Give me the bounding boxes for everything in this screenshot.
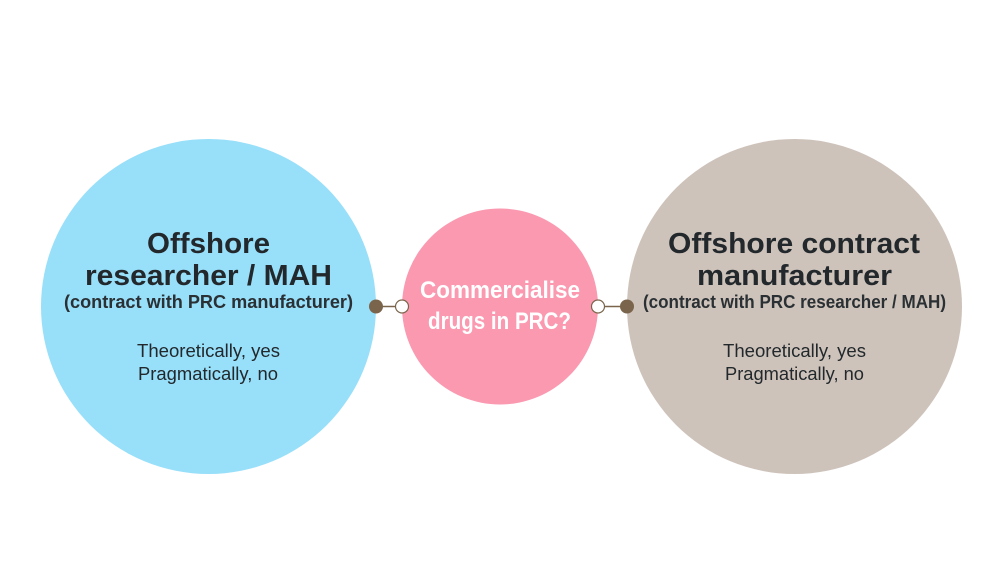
panel: offshore contract manufacturer circle — [627, 139, 962, 474]
text: theoretically yes, pragmatically no — [723, 341, 866, 384]
heading: offshore researcher / MAH — [85, 228, 332, 292]
heading: offshore contract manufacturer: manufacturer — [697, 260, 892, 292]
text: theoretically yes, pragmatically no: Pragmatically, no — [138, 364, 278, 384]
connector: right — [592, 300, 634, 314]
text: commercialise drugs in PRC — [420, 277, 580, 335]
text: contract with PRC researcher / MAH: (contract with PRC researcher / MAH) — [643, 292, 946, 312]
text: theoretically yes, pragmatically no: Theoretically, yes — [723, 341, 866, 361]
panel: commercialise drugs circle — [402, 208, 598, 404]
text: contract with PRC manufacturer: (contract with PRC manufacturer) — [64, 292, 353, 312]
heading: offshore researcher / MAH: researcher / MAH — [85, 260, 332, 292]
heading: offshore researcher / MAH: Offshore — [147, 228, 270, 260]
text: theoretically yes, pragmatically no: Theoretically, yes — [137, 341, 280, 361]
connector: left — [369, 300, 408, 314]
heading: offshore contract manufacturer — [668, 228, 920, 292]
panel: offshore researcher circle — [41, 139, 376, 474]
text: commercialise drugs in PRC: Commercialise — [420, 277, 580, 304]
text: theoretically yes, pragmatically no: Pragmatically, no — [725, 364, 864, 384]
text: theoretically yes, pragmatically no — [137, 341, 280, 384]
heading: offshore contract manufacturer: Offshore contract — [668, 228, 920, 260]
text: commercialise drugs in PRC: drugs in PRC? — [428, 308, 571, 335]
